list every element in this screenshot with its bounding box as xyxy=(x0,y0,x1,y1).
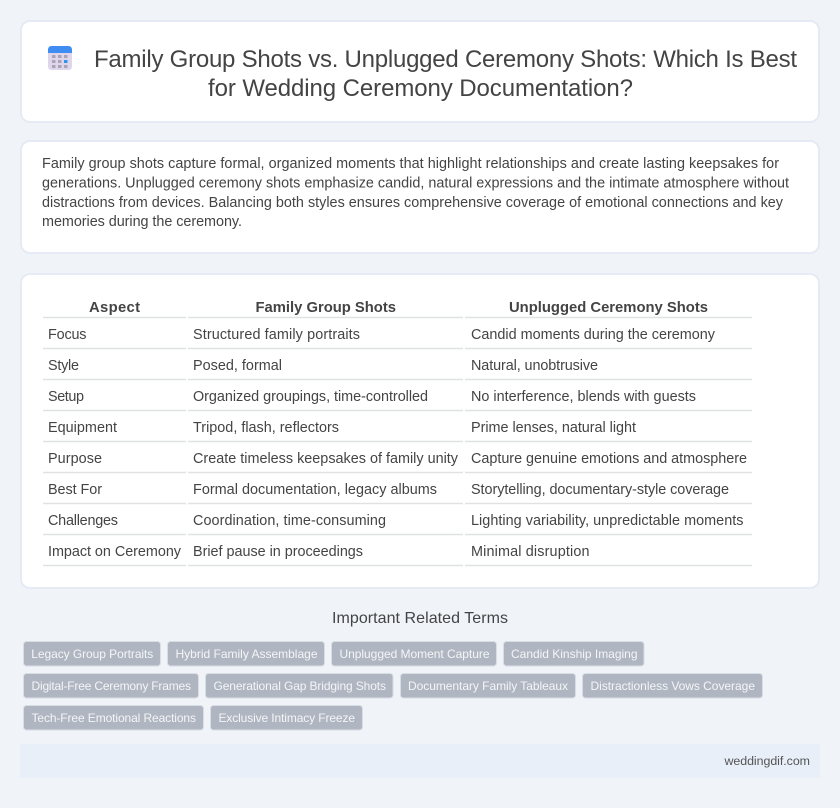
tag: legacy group portraits xyxy=(24,642,160,666)
row: style xyxy=(43,358,752,380)
row: focus: Candid moments during the ceremony xyxy=(471,327,716,343)
table header row: Aspect xyxy=(89,300,140,316)
table header row: Unplugged Ceremony Shots xyxy=(509,300,708,316)
row: challenges xyxy=(43,513,752,534)
tag: digital-free ceremony frames: Digital-Free Ceremony Frames xyxy=(32,679,191,693)
row: best for: Storytelling, documentary-style coverage xyxy=(471,482,729,498)
tag: generational gap bridging shots: Generational Gap Bridging Shots xyxy=(214,679,386,693)
tag: exclusive intimacy freeze: Exclusive Intimacy Freeze xyxy=(218,711,355,725)
row: focus xyxy=(43,327,752,348)
footer source text: weddingdif.com xyxy=(724,754,810,768)
row: focus: Structured family portraits xyxy=(193,327,360,343)
row: best for: Formal documentation, legacy albums xyxy=(193,482,437,498)
row: style: Style xyxy=(48,358,79,374)
row: purpose: Capture genuine emotions and atmosphere xyxy=(471,451,747,467)
title: Family Group Shots vs. Unplugged Ceremony Shots: Which Is Best xyxy=(94,46,797,73)
tag: candid kinship imaging: Candid Kinship Imaging xyxy=(511,647,638,661)
row: equipment: Prime lenses, natural light xyxy=(471,420,636,436)
panel: comparison table xyxy=(21,274,819,588)
panel: header xyxy=(21,21,819,122)
row: setup: No interference, blends with guests xyxy=(471,389,696,405)
row: equipment: Tripod, flash, reflectors xyxy=(193,420,339,436)
panel: introduction xyxy=(21,141,819,253)
row: focus: Focus xyxy=(48,327,86,343)
related terms tags xyxy=(24,642,762,730)
row: equipment: Equipment xyxy=(48,420,117,436)
intro paragraph: distractions from devices. Balancing both styles ensures comprehensive coverage of emotional connections and key xyxy=(42,195,784,211)
tag: digital-free ceremony frames xyxy=(24,674,198,698)
intro paragraph: memories during the ceremony. xyxy=(42,214,242,230)
row: challenges: Lighting variability, unpredictable moments xyxy=(471,513,744,529)
row: style: Posed, formal xyxy=(193,358,282,374)
tag: generational gap bridging shots xyxy=(206,674,393,698)
tag: exclusive intimacy freeze xyxy=(210,706,362,730)
row: best for: Best For xyxy=(48,482,102,498)
row: setup: Setup xyxy=(48,389,84,405)
title: for Wedding Ceremony Documentation? xyxy=(208,75,633,102)
title xyxy=(94,46,797,102)
intro paragraph: generations. Unplugged ceremony shots emphasize candid, natural expressions and the intimate atmosphere without xyxy=(42,176,789,192)
row: impact on ceremony xyxy=(43,544,752,566)
row: challenges: Challenges xyxy=(48,513,118,529)
row: challenges: Coordination, time-consuming xyxy=(193,513,386,529)
row: style: Natural, unobtrusive xyxy=(471,358,598,374)
heading: important related terms: Important Related Terms xyxy=(332,610,508,627)
row: impact on ceremony: Brief pause in proceedings xyxy=(193,544,363,560)
tag: hybrid family assemblage xyxy=(168,642,324,666)
footer xyxy=(20,744,820,778)
tag: unplugged moment capture xyxy=(332,642,496,666)
tag: distractionless vows coverage xyxy=(582,674,762,698)
table header row: Family Group Shots xyxy=(256,300,396,316)
tag: tech-free emotional reactions: Tech-Free Emotional Reactions xyxy=(32,711,196,725)
intro paragraph xyxy=(42,156,789,230)
row: best for xyxy=(43,482,752,504)
tag: hybrid family assemblage: Hybrid Family Assemblage xyxy=(176,647,318,661)
tag: documentary family tableaux: Documentary Family Tableaux xyxy=(408,679,568,693)
tag: tech-free emotional reactions xyxy=(24,706,204,730)
icon: calendar xyxy=(48,46,72,70)
row: equipment xyxy=(43,420,752,442)
tag: candid kinship imaging xyxy=(504,642,644,666)
row: impact on ceremony: Impact on Ceremony xyxy=(48,544,182,560)
row: setup: Organized groupings, time-controlled xyxy=(193,389,428,405)
tag: documentary family tableaux xyxy=(400,674,576,698)
table header row xyxy=(43,300,752,318)
tag: legacy group portraits: Legacy Group Portraits xyxy=(31,647,153,661)
tag: distractionless vows coverage: Distractionless Vows Coverage xyxy=(590,679,755,693)
intro paragraph: Family group shots capture formal, organized moments that highlight relationships and create lasting keepsakes for xyxy=(42,156,779,172)
row: purpose xyxy=(43,451,752,472)
tag: unplugged moment capture: Unplugged Moment Capture xyxy=(340,647,490,661)
row: purpose: Purpose xyxy=(48,451,102,467)
row: setup xyxy=(43,389,752,410)
row: impact on ceremony: Minimal disruption xyxy=(471,544,590,560)
row: purpose: Create timeless keepsakes of family unity xyxy=(193,451,459,467)
